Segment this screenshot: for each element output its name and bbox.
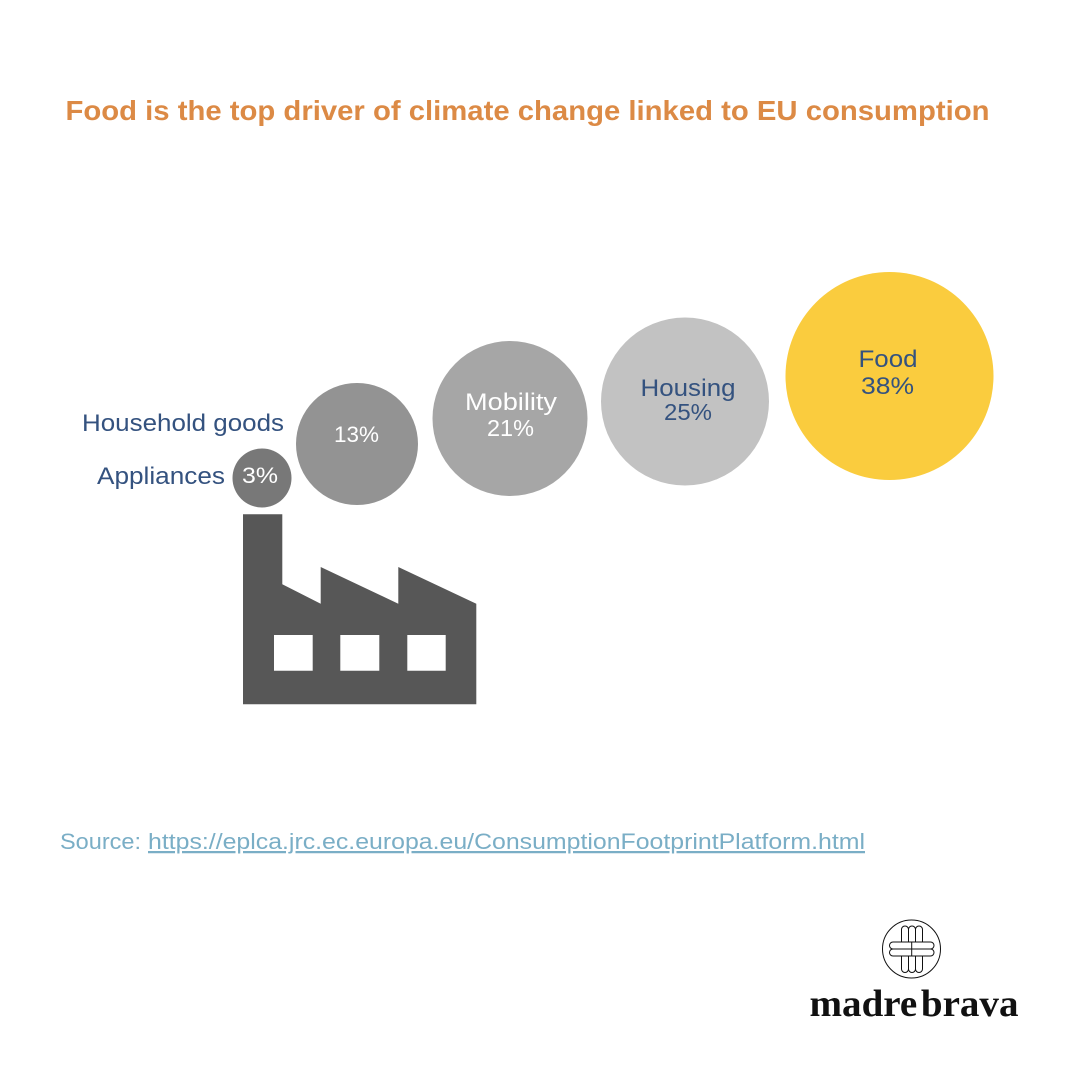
bubble: Food 38%: Food — [858, 346, 918, 373]
bubble: Mobility 21%: 21% — [487, 415, 534, 441]
title: Food is the top driver of climate change linked to EU consumption — [66, 95, 990, 126]
bubble: Mobility 21% — [432, 341, 588, 496]
bubble: Mobility 21%: Mobility — [465, 389, 557, 416]
logo emblem — [882, 920, 940, 978]
chart: bubbles of consumption share — [82, 272, 994, 508]
label: Appliances: Appliances — [97, 463, 225, 490]
logo: madre brava — [810, 920, 1018, 1025]
bubble: Food 38%: 38% — [861, 373, 914, 400]
bubble: Appliances 3%: 3% — [242, 463, 278, 488]
bubble: Appliances 3% — [232, 448, 292, 508]
bubble: Housing 25%: 25% — [664, 399, 712, 425]
source line: https://eplca.jrc.ec.europa.eu/ConsumptionFootprintPlatform.html — [148, 829, 865, 854]
bubble: Household goods 13% — [296, 383, 418, 505]
bubble: Housing 25% — [601, 318, 769, 486]
bubble: Housing 25%: Housing — [640, 375, 736, 402]
bubble: Household goods 13%: 13% — [334, 422, 379, 447]
label: Household goods: Household goods — [82, 410, 284, 437]
logo wordmark: madre brava — [810, 983, 1018, 1025]
source line: Source: — [60, 829, 141, 854]
icon: factory — [243, 514, 476, 704]
bubble: Food 38% — [786, 272, 994, 480]
